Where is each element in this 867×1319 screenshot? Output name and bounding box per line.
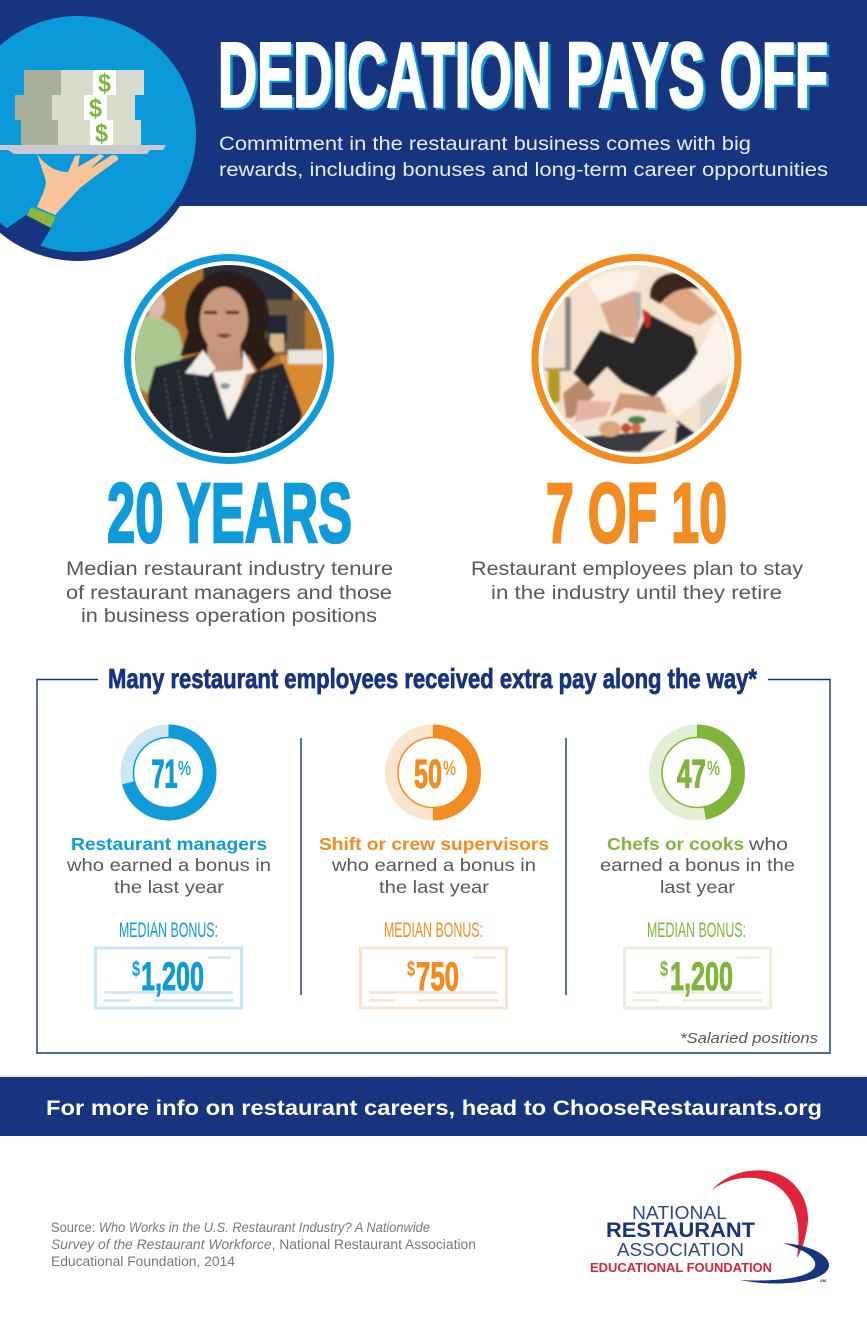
- label: who earned a bonus in: [66, 855, 271, 875]
- description: [471, 559, 804, 604]
- check graphic: $: [132, 958, 140, 981]
- logo: National Restaurant Association Educational Foundation: EDUCATIONAL FOUNDATION: [590, 1261, 772, 1275]
- subtitle: rewards, including bonuses and long-term career opportunities: [219, 160, 828, 181]
- label: who earned a bonus in: [331, 855, 536, 875]
- donut chart 71%: %: [178, 758, 191, 780]
- label: [319, 834, 549, 897]
- donut chart 50%: 50: [414, 752, 442, 796]
- photo: restaurant manager: [128, 258, 330, 460]
- column: chefs or cooks: [600, 731, 795, 1008]
- source text: Educational Foundation, 2014: [51, 1254, 236, 1269]
- logo: National Restaurant Association Educational Foundation: [590, 1170, 829, 1284]
- logo blue swoosh: [740, 1243, 829, 1284]
- header banner: [0, 0, 867, 206]
- check graphic: [360, 948, 506, 1008]
- description: Restaurant employees plan to stay: [471, 559, 804, 580]
- icon: money stacks: $: [98, 68, 111, 98]
- median bonus label: MEDIAN BONUS:: [384, 919, 483, 942]
- big number: 7 OF 10: [546, 466, 727, 560]
- source text: [51, 1220, 476, 1269]
- label: Shift or crew supervisors: [319, 834, 549, 854]
- photo: chefs at work: [535, 258, 738, 460]
- logo: National Restaurant Association Educational Foundation: RESTAURANT: [606, 1219, 755, 1242]
- panel: bonuses: [37, 663, 830, 1053]
- check graphic: $: [660, 958, 668, 981]
- check graphic: 1,200: [141, 955, 204, 999]
- check graphic: [624, 948, 770, 1008]
- label: Restaurant managers: [71, 834, 267, 854]
- call to action band: For more info on restaurant careers, head to ChooseRestaurants.org: [46, 1097, 822, 1120]
- median bonus label: MEDIAN BONUS:: [119, 919, 218, 942]
- check graphic: 750: [416, 955, 459, 999]
- icon: sleeve: [7, 215, 51, 246]
- label: the last year: [114, 877, 224, 897]
- stat: 7 of 10: [471, 466, 804, 604]
- donut chart 47%: [656, 731, 738, 814]
- check graphic: $: [407, 958, 415, 981]
- source text: Source: Who Works in the U.S. Restaurant Industry? A Nationwide: [51, 1220, 430, 1235]
- subtitle: [219, 134, 828, 181]
- label: [600, 834, 795, 897]
- icon: hand: [37, 154, 118, 215]
- icon: money stacks: $: [89, 93, 102, 123]
- median bonus label: MEDIAN BONUS:: [647, 919, 746, 942]
- icon: hand holding tray of money: [0, 16, 200, 261]
- donut chart 47%: 47: [677, 752, 706, 796]
- logo red arc: [712, 1170, 808, 1258]
- call to action band: [0, 1075, 867, 1136]
- logo: National Restaurant Association Educational Foundation: SM: [820, 1278, 827, 1283]
- label: Chefs or cooks: [607, 834, 744, 854]
- label: who: [748, 834, 788, 854]
- source text: Survey of the Restaurant Workforce , National Restaurant Association: [51, 1237, 476, 1252]
- label: [66, 834, 271, 897]
- donut chart 71%: [127, 731, 210, 814]
- column: restaurant managers: [66, 731, 271, 1008]
- icon: tray: [0, 145, 166, 154]
- icon: money stacks: $: [95, 118, 108, 148]
- donut chart 50%: %: [443, 758, 456, 780]
- description: [66, 559, 393, 627]
- icon: green cuff: [25, 207, 56, 230]
- donut chart 47%: %: [707, 758, 720, 780]
- big number: 20 YEARS: [107, 466, 352, 560]
- description: in business operation positions: [81, 606, 377, 627]
- icon: money stacks: [15, 68, 144, 148]
- donut chart 71%: 71: [152, 752, 178, 796]
- label: the last year: [379, 877, 489, 897]
- description: of restaurant managers and those: [66, 583, 392, 604]
- description: in the industry until they retire: [491, 583, 782, 604]
- stat: 20 years: [66, 466, 393, 627]
- check graphic: [96, 948, 242, 1008]
- logo: National Restaurant Association Educational Foundation: ASSOCIATION: [617, 1239, 744, 1260]
- description: Median restaurant industry tenure: [66, 559, 393, 580]
- column: shift supervisors: [319, 731, 549, 1008]
- subtitle: Commitment in the restaurant business comes with big: [219, 134, 751, 155]
- donut chart 50%: [392, 731, 474, 814]
- check graphic: 1,200: [670, 955, 733, 999]
- footnote: *Salaried positions: [680, 1031, 818, 1047]
- label: last year: [660, 877, 735, 897]
- logo: National Restaurant Association Educational Foundation: NATIONAL: [632, 1202, 727, 1223]
- label: earned a bonus in the: [600, 855, 795, 875]
